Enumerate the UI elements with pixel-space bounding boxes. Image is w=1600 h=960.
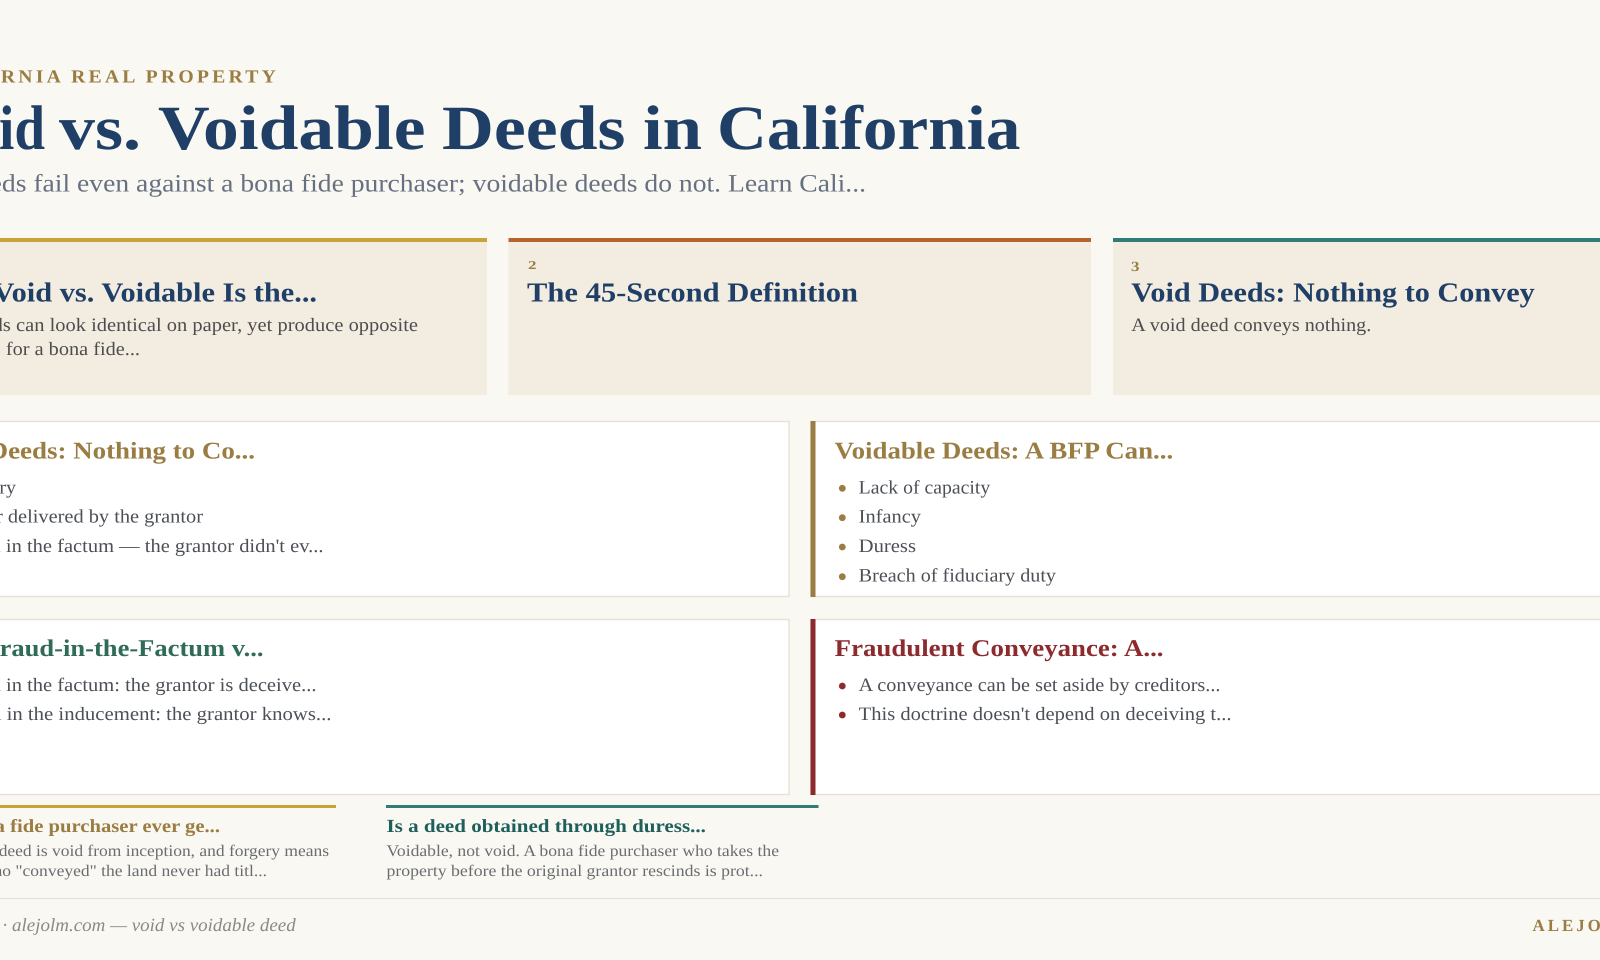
- panel: section card 2: [508, 238, 1091, 395]
- voidable deeds bullets: [839, 477, 1057, 587]
- fraudulent conveyance heading: Fraudulent Conveyance: A...: [835, 636, 1164, 662]
- panel: faq 2: [386, 805, 818, 880]
- void deeds bullets: [0, 477, 323, 557]
- card 2 heading: The 45-Second Definition: [527, 277, 858, 308]
- voidable deeds bullets: Breach of fiduciary duty: [859, 566, 1057, 587]
- title: id: [0, 93, 45, 163]
- card 1 body: [0, 315, 418, 360]
- title: Deeds: [442, 93, 626, 163]
- voidable deeds bullets: Lack of capacity: [859, 477, 991, 498]
- voidable deeds heading: Voidable Deeds: A BFP Can...: [835, 438, 1173, 464]
- fraud in the factum bullets: [0, 675, 331, 725]
- panel: fraudulent conveyance list: [810, 619, 1600, 795]
- footer: [2, 916, 1600, 936]
- faq 2 answer: property before the original grantor rescinds is prot...: [386, 862, 763, 880]
- card 2 number: 2: [528, 258, 536, 272]
- panel: section card 1: [0, 238, 487, 395]
- card 3 heading: Void Deeds: Nothing to Convey: [1131, 277, 1535, 309]
- header: [0, 67, 1020, 198]
- footer source line: · alejolm.com — void vs voidable deed: [2, 916, 296, 936]
- voidable deeds bullets: Infancy: [859, 507, 922, 528]
- panel: void deeds list: [0, 422, 789, 596]
- voidable deeds bullets: Duress: [859, 536, 916, 557]
- title: Voidable: [158, 93, 426, 163]
- fraudulent conveyance bullets: A conveyance can be set aside by creditors...: [859, 675, 1220, 696]
- title: vs.: [59, 93, 141, 163]
- panel: faq 1: [0, 805, 336, 880]
- panel: voidable deeds list: [810, 421, 1600, 597]
- fraudulent conveyance bullets: [839, 675, 1232, 725]
- card 3 number: 3: [1131, 260, 1140, 275]
- panel: fraud in the factum list: [0, 620, 789, 794]
- title: in: [643, 93, 702, 163]
- faq 2 question: Is a deed obtained through duress...: [386, 817, 706, 837]
- faq 2 answer: Voidable, not void. A bona fide purchaser who takes the: [386, 842, 779, 860]
- title: California: [717, 93, 1020, 163]
- panel: section card 3: [1113, 238, 1600, 395]
- fraudulent conveyance bullets: This doctrine doesn't depend on deceiving t...: [859, 704, 1232, 725]
- card 3 body: A void deed conveys nothing.: [1131, 315, 1371, 336]
- faq 2 answer: [386, 842, 779, 880]
- faq 1 answer: [0, 842, 329, 880]
